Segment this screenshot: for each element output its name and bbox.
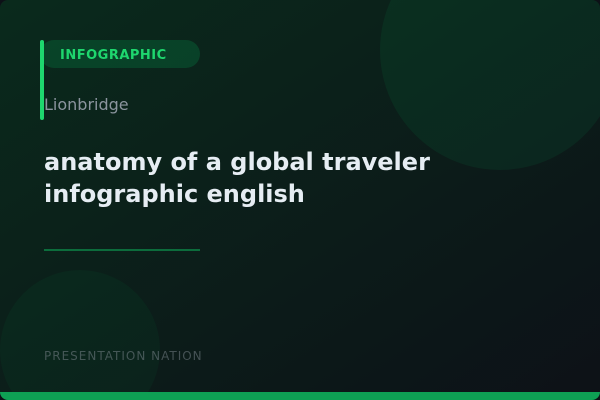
source name: Lionbridge [44,95,129,114]
left accent bar [40,40,44,120]
title: infographic english [44,180,305,208]
divider [44,249,200,251]
category pill [40,40,200,68]
bottom accent bar [0,392,600,400]
category label: INFOGRAPHIC [60,48,167,63]
circle: top right [380,0,600,170]
circle: bottom left [0,270,160,392]
footer credit: PRESENTATION NATION [44,349,203,363]
title [44,148,430,208]
title: anatomy of a global traveler [44,148,430,176]
